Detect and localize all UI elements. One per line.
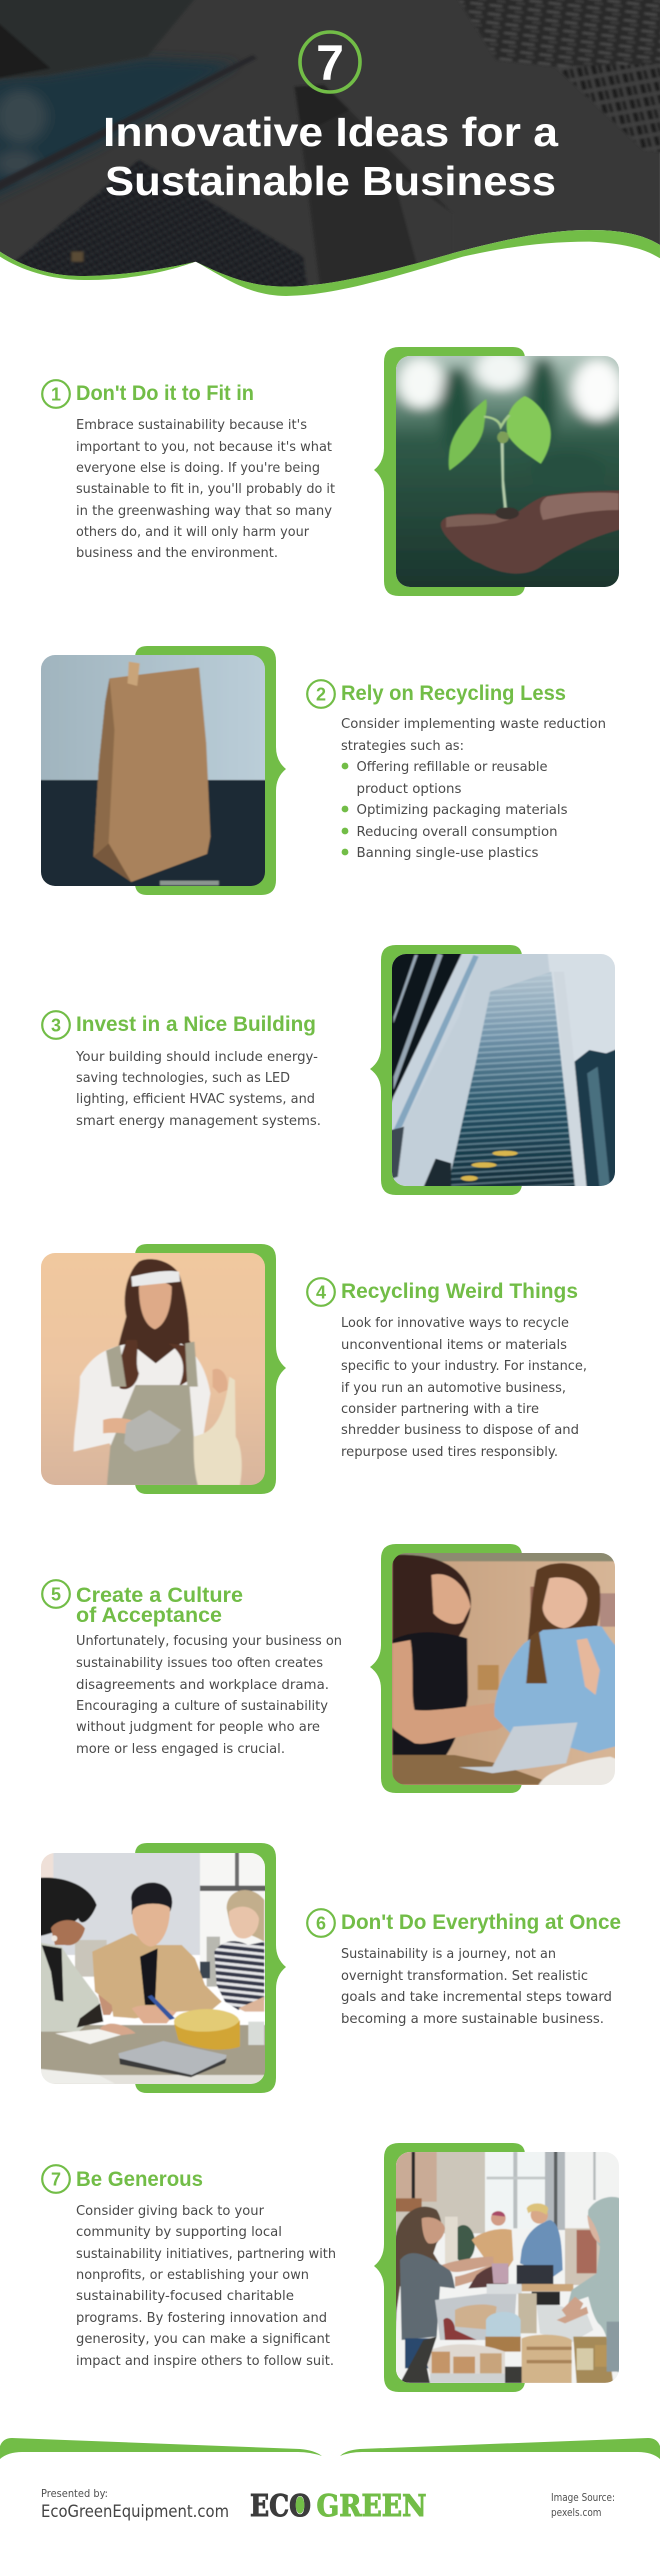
green bracket frame (374, 2143, 525, 2392)
body text: generosity, you can make a significant (76, 2332, 330, 2347)
logo: ECO (250, 2489, 311, 2524)
image source: pexels.com (551, 2507, 602, 2519)
presented by: EcoGreenEquipment.com (41, 2502, 229, 2522)
badge 5 (42, 1580, 70, 1608)
badge 1 (42, 380, 70, 408)
badge 6 (307, 1909, 335, 1937)
panel: step 7 (42, 2143, 627, 2392)
body text: shredder business to dispose of and (341, 1423, 579, 1438)
header photo: skyscrapers with dark overlay (0, 0, 660, 310)
badge 3 (42, 1011, 70, 1039)
photo: woman holding plastic and net bag (41, 1253, 265, 1485)
photo: brown paper bag (41, 655, 265, 886)
body text with bullets: Banning single-use plastics (356, 846, 539, 861)
heading: Recycling Weird Things (341, 1279, 578, 1303)
body text: consider partnering with a tire (341, 1402, 539, 1417)
body text (341, 1947, 612, 2027)
photo: glass skyscraper (392, 954, 615, 1186)
logo: GREEN (316, 2489, 426, 2524)
body text: smart energy management systems. (76, 1114, 321, 1129)
body text: business and the environment. (76, 546, 278, 561)
title: Innovative Ideas for a (103, 109, 559, 155)
badge 7: 7 (51, 2170, 61, 2190)
title: Sustainable Business (105, 158, 556, 204)
presented by: Presented by: (41, 2487, 108, 2500)
photo: volunteers sorting donations (396, 2152, 619, 2383)
body text: without judgment for people who are (76, 1720, 320, 1735)
body text (75, 1050, 321, 1129)
heading: Rely on Recycling Less (341, 681, 566, 705)
header banner (0, 0, 660, 310)
body text: in the greenwashing way that so many (76, 504, 332, 519)
green bracket frame (370, 945, 522, 1195)
body text: saving technologies, such as LED (76, 1071, 290, 1086)
body text: community by supporting local (76, 2225, 282, 2240)
body text: disagreements and workplace drama. (76, 1678, 329, 1693)
body text with bullets: product options (356, 782, 462, 797)
badge 4 (307, 1278, 335, 1306)
badge 4: 4 (316, 1282, 326, 1302)
heading: Be Generous (76, 2167, 203, 2191)
green bracket frame (374, 347, 525, 596)
body text with bullets: strategies such as: (341, 739, 464, 754)
photo: three colleagues at a table (41, 1853, 265, 2084)
heading: of Acceptance (76, 1603, 222, 1627)
body text with bullets: Offering refillable or reusable (356, 760, 548, 775)
body text: Embrace sustainability because it's (76, 418, 307, 433)
body text: Encouraging a culture of sustainability (76, 1699, 328, 1714)
heading (76, 1583, 243, 1627)
body text: programs. By fostering innovation and (76, 2311, 327, 2326)
logo (250, 2489, 426, 2524)
body text: repurpose used tires responsibly. (341, 1445, 558, 1460)
badge 3: 3 (51, 1016, 61, 1036)
body text (76, 2204, 336, 2369)
heading: Invest in a Nice Building (76, 1012, 316, 1036)
green bracket frame (370, 1544, 522, 1793)
image source (551, 2492, 615, 2519)
body text: Sustainability is a journey, not an (341, 1947, 556, 1962)
body text: sustainability issues too often creates (76, 1656, 323, 1671)
green bracket frame (135, 1843, 286, 2093)
body text: lighting, efficient HVAC systems, and (76, 1092, 315, 1107)
green swoosh divider (0, 2438, 660, 2459)
body text: becoming a more sustainable business. (341, 2012, 604, 2027)
body text: goals and take incremental steps toward (341, 1990, 612, 2005)
green wave border (0, 230, 660, 296)
badge 2: 2 (316, 684, 326, 704)
body text: Your building should include energy- (75, 1050, 318, 1065)
heading: Create a Culture (76, 1583, 243, 1607)
body text: Unfortunately, focusing your business on (76, 1634, 342, 1649)
badge 5: 5 (51, 1584, 61, 1604)
image source: Image Source: (551, 2492, 615, 2504)
body text with bullets: Reducing overall consumption (356, 825, 558, 840)
title (103, 109, 559, 204)
body text: sustainable to fit in, you'll probably do it (76, 482, 335, 497)
body text: others do, and it will only harm your (76, 525, 309, 540)
photo: two women talking with a laptop (392, 1553, 615, 1785)
body text (76, 1634, 342, 1757)
heading: Don't Do Everything at Once (341, 1910, 621, 1934)
body text: sustainability initiatives, partnering with (76, 2247, 336, 2262)
heading: Don't Do it to Fit in (76, 381, 254, 405)
number badge 7: 7 (316, 35, 344, 91)
panel: step 2 (29, 646, 606, 895)
body text: sustainability-focused charitable (76, 2289, 294, 2304)
body text with bullets (341, 717, 606, 861)
badge 7 (42, 2165, 70, 2193)
body text with bullets: Consider implementing waste reduction (341, 717, 606, 732)
body text (341, 1316, 587, 1460)
body text: specific to your industry. For instance, (341, 1359, 587, 1374)
body text: impact and inspire others to follow suit. (76, 2354, 334, 2369)
body text: more or less engaged is crucial. (76, 1742, 285, 1757)
panel: step 6 (35, 1843, 621, 2095)
body text: unconventional items or materials (341, 1338, 567, 1353)
body text: Consider giving back to your (76, 2204, 264, 2219)
badge 1: 1 (51, 384, 61, 404)
footer (0, 2438, 660, 2524)
panel: step 5 (42, 1544, 627, 1793)
badge 2 (307, 680, 335, 708)
body text: if you run an automotive business, (341, 1381, 566, 1396)
body text (76, 418, 335, 561)
panel: step 1 (41, 347, 619, 596)
green bracket frame (135, 1244, 286, 1494)
body text: overnight transformation. Set realistic (341, 1969, 588, 1984)
badge 6: 6 (316, 1914, 326, 1934)
presented by (41, 2487, 229, 2522)
number badge 7 (300, 32, 360, 92)
body text: Look for innovative ways to recycle (341, 1316, 569, 1331)
panel: step 3 (42, 945, 627, 1195)
body text with bullets: Optimizing packaging materials (356, 803, 568, 818)
body text: nonprofits, or establishing your own (76, 2268, 309, 2283)
green bracket frame (135, 646, 286, 895)
body text: everyone else is doing. If you're being (76, 461, 320, 476)
body text: important to you, not because it's what (76, 440, 332, 455)
photo: seedling in a hand (396, 356, 619, 587)
panel: step 4 (29, 1243, 587, 1497)
